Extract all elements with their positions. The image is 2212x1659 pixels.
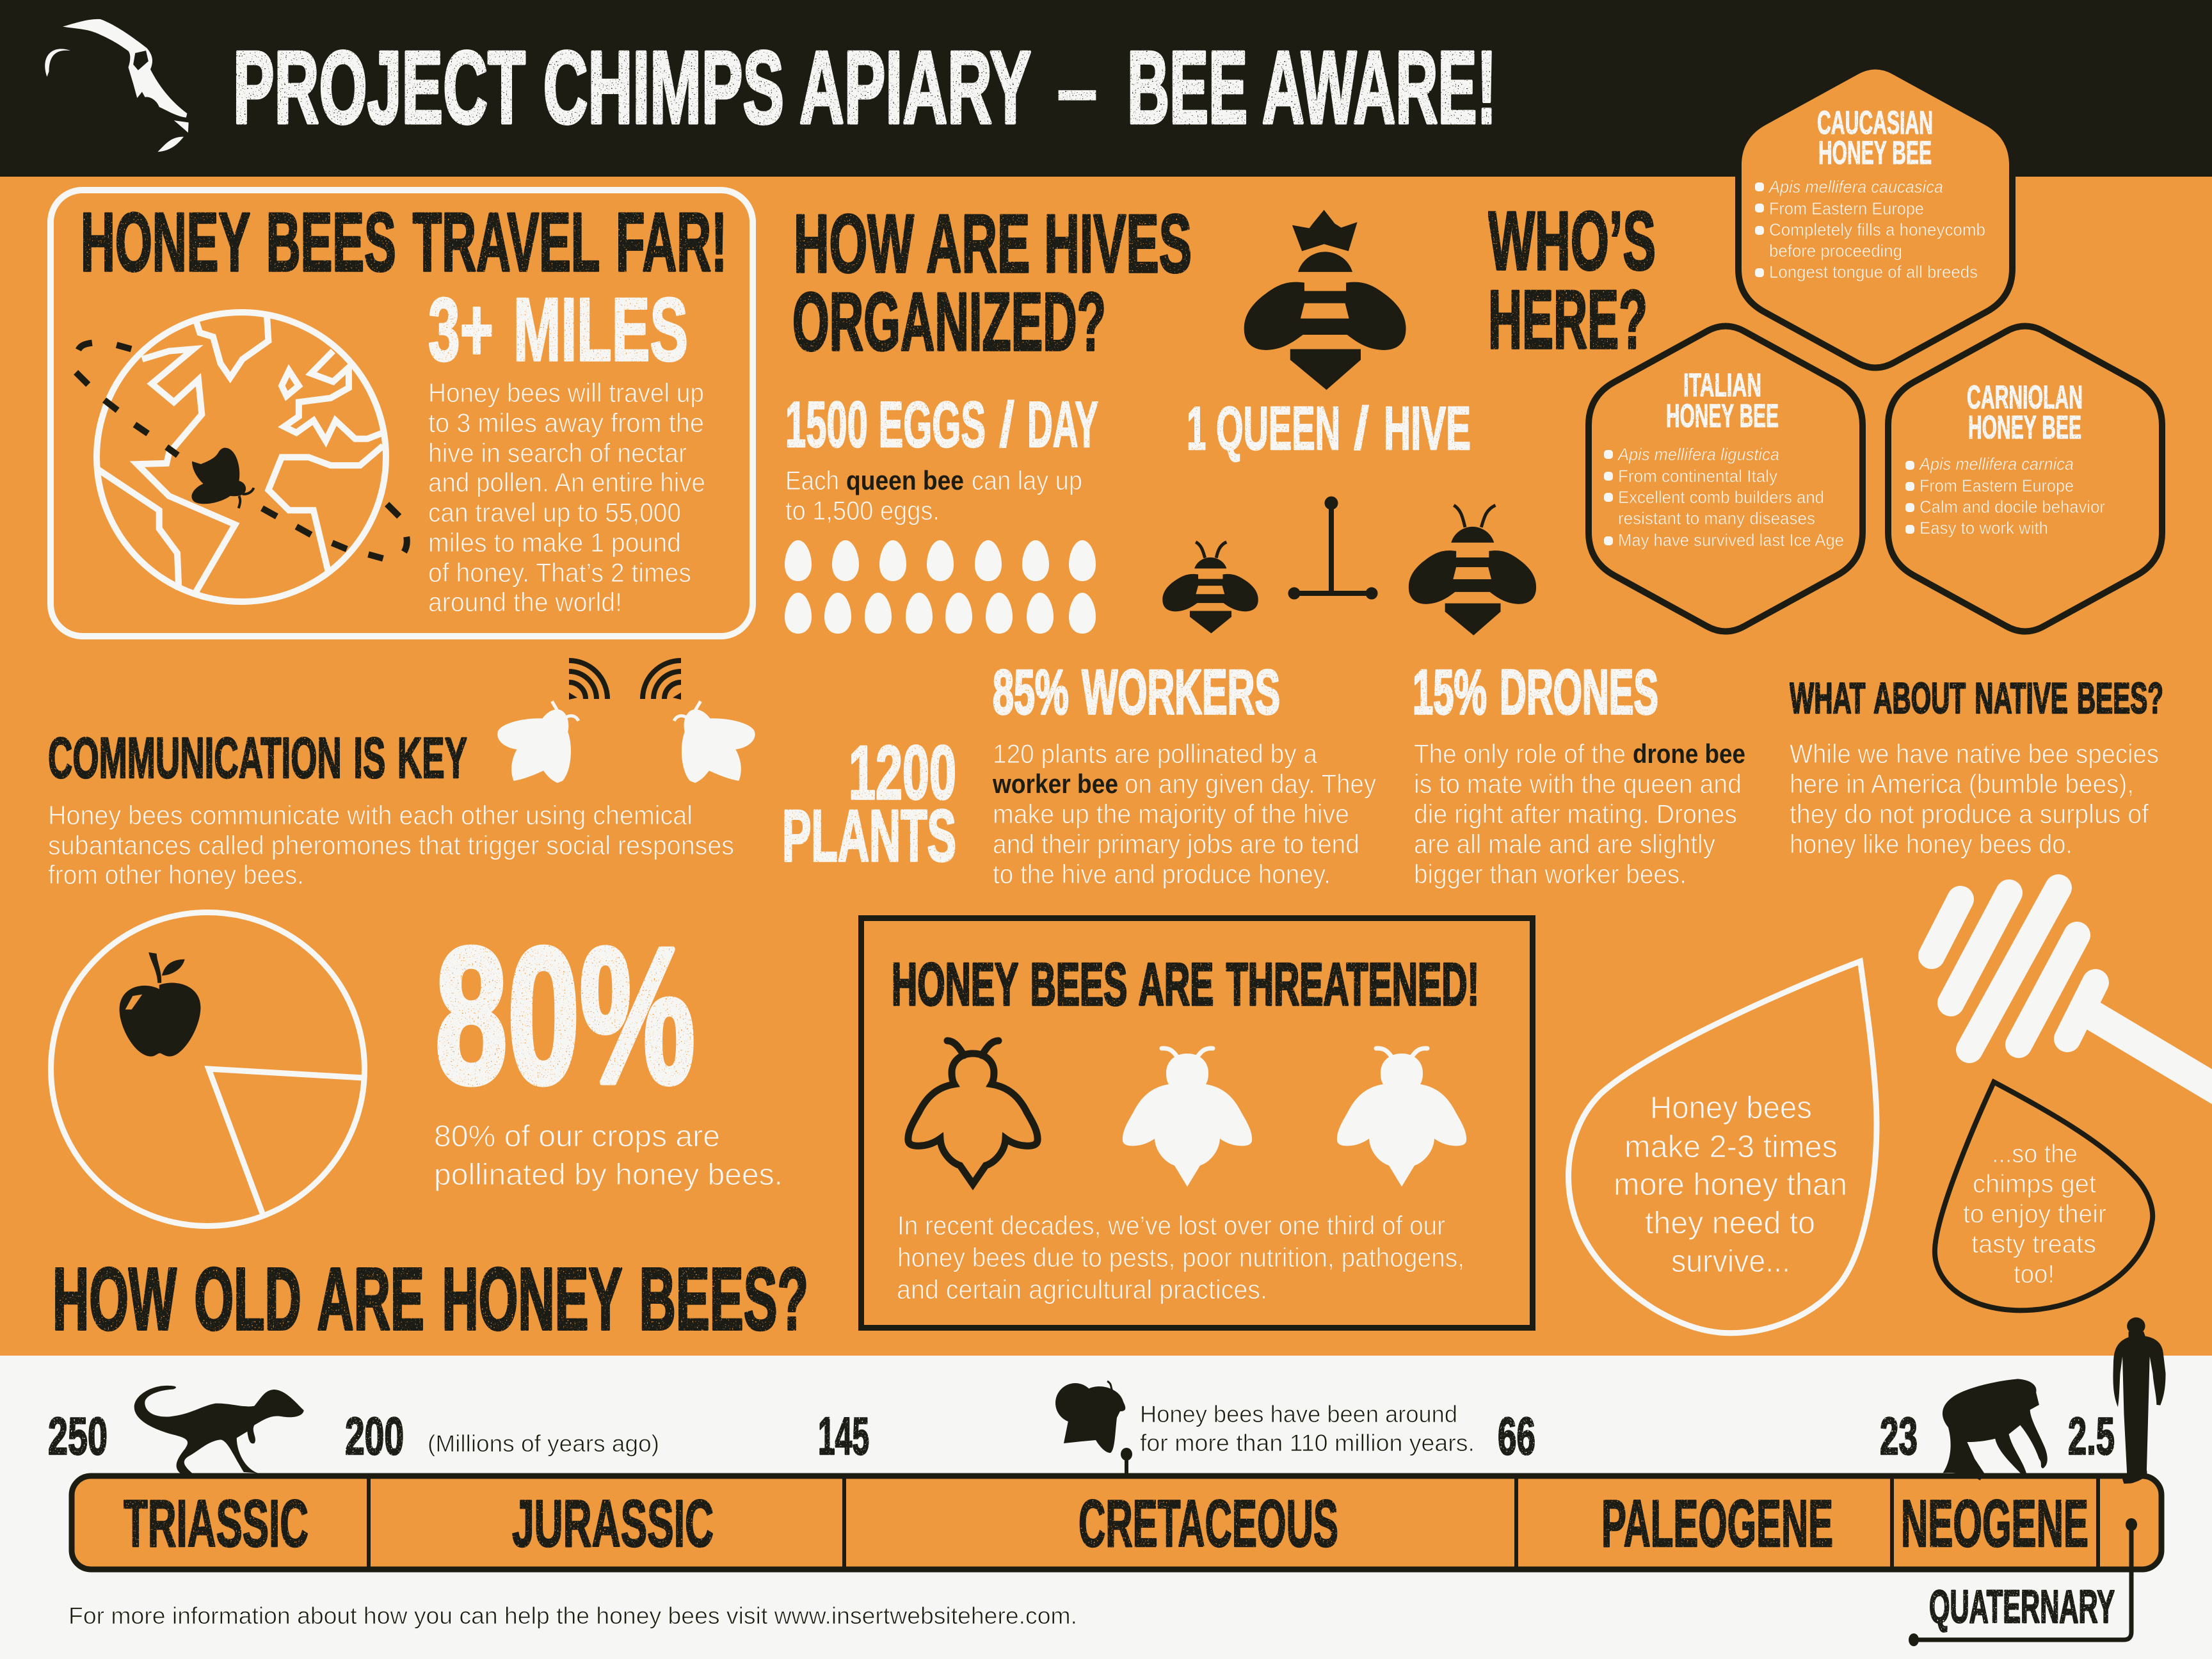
text: bees age note: Honey bees have been around [1140,1401,1457,1427]
list: Italian facts: From continental Italy [1618,467,1777,486]
period labels: JURASSIC [512,1487,714,1561]
stat: 3+ miles: 3+ MILES [428,279,688,380]
text: queen bee eggs [785,465,1082,525]
text: native bees description: here in America (bumble bees), [1790,769,2134,799]
icon: outlined bee [908,1041,1038,1184]
text: travel description: around the world! [428,587,622,617]
stat: 15% drones: 15% DRONES [1413,657,1658,727]
timeline numbers: 2.5 [2068,1406,2115,1466]
callout: small honey drop: tasty treats [1971,1230,2096,1258]
text: native bees description: they do not produce a surplus of [1790,799,2149,829]
heading: Caucasian: HONEY BEE [1818,134,1932,171]
list: Carniolan facts: Calm and docile behavior [1919,497,2105,517]
heading: communication is key: COMMUNICATION IS KEY [48,726,467,790]
icon: drone bee [1409,505,1536,636]
callout: large honey drop: Honey bees [1650,1091,1812,1125]
hexagon: Caucasian honey bee [1738,67,2012,367]
text: drone description: is to mate with the queen and [1414,769,1742,799]
heading: who's here [1488,194,1656,366]
stat: 1500 eggs per day: / [998,389,1015,461]
list: Italian facts: May have survived last Ice Age [1618,531,1844,550]
icon: apple [120,952,200,1057]
panel: honey bees travel far [51,190,753,636]
text: drone description: bigger than worker bees. [1414,859,1687,889]
heading: Carniolan: CARNIOLAN [1967,379,2083,415]
icon: chimp profile logo [45,19,189,152]
heading: Carniolan: HONEY BEE [1968,409,2081,445]
text: queen bee eggs: to 1,500 eggs. [785,495,940,525]
callout: small honey drop: chimps get [1973,1170,2096,1198]
period labels [124,1487,2088,1561]
marker: bee timeline pin [1121,1448,1132,1475]
text: travel description: hive in search of nectar [428,438,687,468]
text: worker description: to the hive and produce honey. [993,859,1331,889]
stat: 1 queen per hive: HIVE [1384,394,1471,463]
list: Caucasian facts: before proceeding [1769,241,1902,260]
hexagon: Carniolan honey bee [1888,326,2162,631]
list: Carniolan facts: Easy to work with [1919,518,2048,538]
text: drone description [1414,739,1745,889]
icon: T connector [1288,497,1377,599]
text: communication description [48,800,734,890]
list: Caucasian facts: Apis mellifera caucasica [1768,177,1943,196]
text: queen bee eggs: can lay up [972,465,1082,495]
icon: honey dipper [1932,888,2212,1100]
text: drone description: are all male and are slightly [1414,829,1715,859]
callout: large honey drop: they need to [1645,1206,1815,1240]
text: travel description: of honey. That’s 2 times [428,557,691,588]
icon: chimpanzee [1943,1379,2048,1480]
text: travel description: to 3 miles away from the [428,408,704,438]
text: travel description: miles to make 1 pound [428,527,681,557]
icon: bees signalling [497,701,755,783]
icon: worker bee [1162,542,1258,634]
callout: small honey drop [1935,1082,2152,1310]
timeline numbers: 250 [48,1406,108,1466]
timeline numbers: 145 [818,1406,869,1466]
text: travel description: can travel up to 55,000 [428,497,681,527]
timeline numbers: 23 [1880,1406,1918,1466]
list: Caucasian facts: Completely fills a honeycomb [1769,220,1985,239]
stat: 1 queen per hive: 1 QUEEN [1187,394,1340,463]
text: worker description: worker bee [992,769,1118,799]
text: millions of years ago: (Millions of years ago) [428,1431,659,1457]
text: drone description: The only role of the [1414,739,1626,769]
callout: small honey drop: to enjoy their [1963,1200,2106,1228]
text: travel description: and pollen. An entire hive [428,467,705,497]
heading: Caucasian: CAUCASIAN [1817,104,1933,141]
heading: Italian: HONEY BEE [1666,397,1779,434]
callout: small honey drop: too! [2014,1260,2055,1288]
text: bees age note: for more than 110 million years. [1140,1430,1475,1456]
stat: 80%: 80% [435,908,695,1123]
list: Italian facts: Apis mellifera ligustica [1617,445,1779,464]
text: travel description: Honey bees will travel up [428,378,704,408]
icon: rows of eggs [785,540,1096,634]
text: worker description: make up the majority of the hive [993,799,1349,829]
text: 80% of crops: pollinated by honey bees. [434,1157,783,1191]
text: queen bee eggs: Each [785,465,839,495]
text: worker description: and their primary jobs are to tend [993,829,1359,859]
stat: 1200 plants [782,730,956,877]
hexagon: Italian honey bee [1589,326,1863,631]
text: 80% of crops [434,1119,783,1191]
header band [0,0,2212,177]
icon: white bee [1337,1048,1466,1187]
text: 80% of crops: 80% of our crops are [434,1119,720,1153]
text: native bees description: honey like honey bees do. [1790,829,2072,859]
stat: 1200 plants: 1200 [849,730,956,815]
heading: how old are honey bees: HOW OLD ARE HONEY BEES? [52,1250,808,1349]
footer band [0,1356,2212,1659]
list: Italian facts: Excellent comb builders and [1618,488,1824,507]
list: Caucasian facts: From Eastern Europe [1769,199,1924,218]
heading: Italian [1666,367,1779,434]
text: bees age note [1140,1401,1475,1456]
callout: small honey drop: ...so the [1992,1140,2078,1168]
callout: large honey drop [1569,961,1877,1333]
list: Caucasian facts [1755,177,1985,282]
timeline numbers: 66 [1498,1406,1535,1466]
text: native bees description: While we have native bee species [1790,739,2159,769]
list: Carniolan facts: From Eastern Europe [1919,476,2074,495]
stat: 1200 plants: PLANTS [782,796,956,877]
period labels: CRETACEOUS [1078,1487,1338,1561]
connector: quaternary pointer [1909,1518,2137,1646]
panel: honey bees are threatened [862,918,1532,1327]
callout: large honey drop: make 2-3 times [1624,1130,1838,1164]
list: Italian facts [1604,445,1844,550]
heading: Carniolan [1967,379,2083,445]
callout: large honey drop: more honey than [1614,1167,1847,1202]
text: native bees description [1790,739,2159,859]
text: worker description: on any given day. They [1125,769,1376,799]
text: threat description: and certain agricultural practices. [897,1274,1267,1304]
stat: 1500 eggs per day: 1500 EGGS [785,389,986,461]
timeline numbers: 200 [345,1406,404,1466]
list: Caucasian facts: Longest tongue of all breeds [1769,262,1978,282]
title: BEE AWARE! [1127,30,1496,145]
heading: Italian: ITALIAN [1683,367,1761,403]
heading: who's here: WHO’S [1488,194,1656,287]
icon: dinosaur [134,1386,304,1473]
heading: threatened: HONEY BEES ARE THREATENED! [892,950,1479,1018]
period labels: TRIASSIC [124,1487,309,1561]
icon: queen bee with crown [1244,210,1406,390]
text: communication description: from other honey bees. [48,860,304,890]
text: communication description: subantances called pheromones that trigger social responses [48,830,734,860]
period labels: PALEOGENE [1601,1487,1833,1561]
footer text: For more information about how you can help the honey bees visit www.insertwebsitehere.com. [68,1603,1077,1629]
heading: how are hives organized: HOW ARE HIVES [794,198,1192,290]
list: Carniolan facts [1905,454,2105,538]
heading: travel far: HONEY BEES TRAVEL FAR! [81,195,727,289]
heading: how are hives organized [792,198,1192,368]
text: threat description [897,1210,1464,1304]
heading: Caucasian [1817,104,1933,171]
text: threat description: honey bees due to pests, poor nutrition, pathogens, [897,1242,1464,1272]
text: drone description: die right after mating. Drones [1414,799,1737,829]
text: worker description [992,739,1376,889]
chart: 80% pie [51,913,365,1226]
title: PROJECT CHIMPS APIARY [233,30,1031,145]
title: – [1056,30,1098,145]
text: worker description: 120 plants are pollinated by a [993,739,1318,769]
text: communication description: Honey bees communicate with each other using chemical [48,800,693,830]
timeline bar [72,1476,2161,1569]
stat: 85% workers: 85% WORKERS [993,657,1280,727]
text: travel description [428,378,705,617]
list: Italian facts: resistant to many diseases [1618,509,1815,528]
stat: 1500 eggs per day: DAY [1027,389,1098,461]
stat: 1 queen per hive: / [1353,394,1370,463]
text: queen bee eggs: queen bee [846,465,964,495]
icon: human [2113,1317,2166,1484]
icon: signal waves [569,661,681,700]
callout: large honey drop: survive... [1671,1244,1790,1279]
heading: who's here: HERE? [1488,273,1647,366]
text: drone description: drone bee [1633,739,1745,769]
icon: bee on timeline [1055,1381,1125,1453]
icon: white bee [1123,1048,1252,1187]
heading: how are hives organized: ORGANIZED? [792,276,1106,368]
timeline numbers [48,1406,2115,1466]
list: Carniolan facts: Apis mellifera carnica [1918,454,2074,474]
text: threat description: In recent decades, we’ve lost over one third of our [897,1210,1445,1240]
icon: globe with flight path [76,312,407,602]
icon: bee on globe [191,448,253,508]
